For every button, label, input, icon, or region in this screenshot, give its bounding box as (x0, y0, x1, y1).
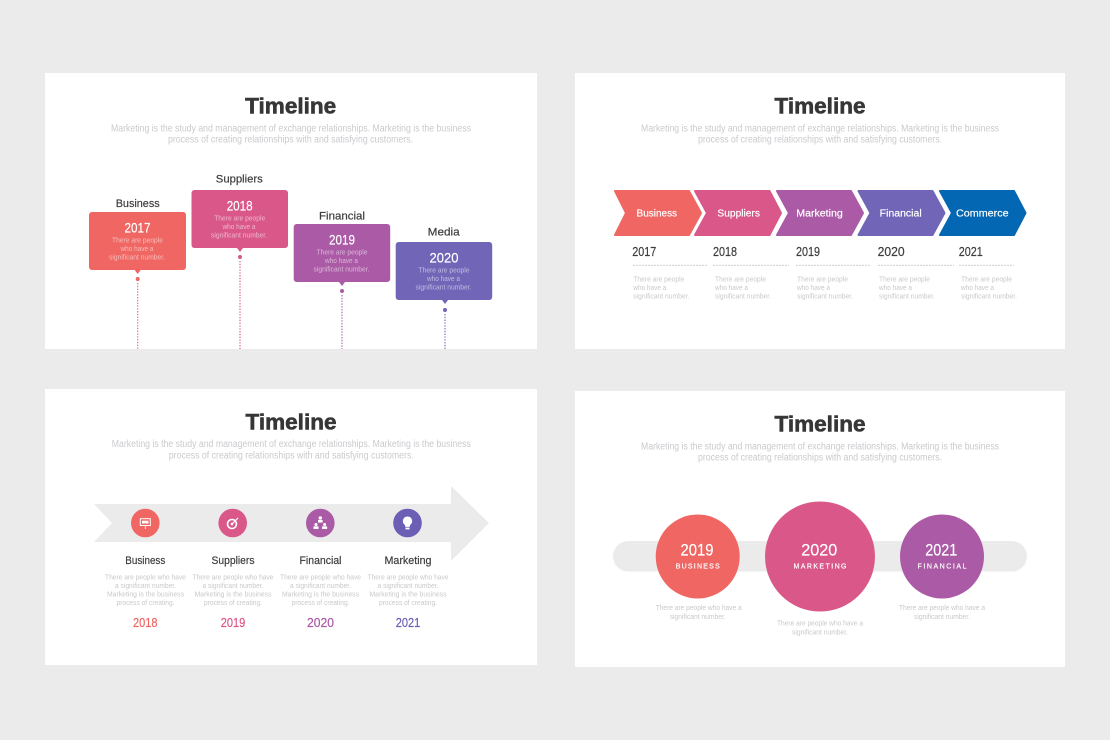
circle: 2019 Business: There are people who have a (656, 603, 742, 612)
subtitle: Marketing is the study and management of exchange relationships. Marketing is the business (112, 439, 471, 450)
milestone: Media 2020: significant number. (416, 282, 472, 292)
circle: 2019 Business: BUSINESS (676, 564, 720, 571)
step: Marketing: Marketing is the business (370, 590, 447, 599)
step details: 2020: 2020 (878, 244, 905, 259)
milestone: Suppliers 2018: who have a (222, 222, 256, 231)
subtitle (641, 442, 999, 464)
panel: stepped callout timeline (45, 73, 537, 349)
step: Suppliers: Suppliers (212, 555, 255, 567)
chevron: Marketing: Marketing (796, 208, 843, 220)
chevron: Business (615, 191, 701, 235)
step: Suppliers: Marketing is the business (194, 590, 272, 599)
chevron: Marketing (777, 191, 863, 235)
chevron: Business: Business (637, 208, 677, 220)
subtitle: process of creating relationships with and satisfying customers. (698, 135, 942, 146)
step: Financial: 2020 (307, 615, 334, 630)
milestone: Financial 2019: Financial (319, 210, 365, 222)
step details: 2018: 2018 (713, 244, 737, 259)
step details: 2020: There are people (879, 275, 930, 284)
step: Business: process of creating. (116, 598, 174, 607)
icon: target (218, 509, 247, 537)
subtitle: process of creating relationships with and satisfying customers. (169, 450, 414, 461)
milestone: Financial 2019 (294, 210, 390, 349)
circle: 2021 Financial: significant number. (914, 612, 970, 621)
step details: 2019: significant number. (797, 292, 853, 300)
title: Timeline (774, 94, 866, 119)
subtitle (641, 124, 999, 146)
step: Financial: a significant number. (290, 581, 351, 590)
step details: 2020: who have a (878, 283, 913, 292)
step: Financial (280, 509, 361, 630)
milestone: Business 2017 (89, 198, 186, 349)
step: Financial: Financial (300, 555, 342, 567)
title: Timeline (245, 94, 336, 119)
step: Suppliers: a significant number. (202, 581, 264, 590)
title: Timeline (246, 409, 336, 434)
milestone: Suppliers 2018: Suppliers (216, 173, 263, 185)
step: Suppliers (192, 509, 274, 630)
subtitle: process of creating relationships with and satisfying customers. (698, 453, 942, 464)
circle: 2020 Marketing: There are people who have a (777, 619, 864, 628)
icon: presentation board (131, 509, 160, 537)
circle: 2019 Business: significant number. (670, 612, 726, 621)
milestone: Financial 2019: who have a (324, 256, 359, 265)
step: Financial: process of creating. (292, 598, 350, 607)
grey pill track (613, 541, 1027, 572)
circle: 2021 Financial (899, 514, 986, 621)
step details: 2019 (796, 244, 871, 300)
chevron: Commerce: Commerce (956, 208, 1009, 220)
subtitle (112, 439, 471, 461)
step: Business: a significant number. (115, 581, 176, 590)
step: Financial: Marketing is the business (282, 590, 359, 599)
step details: 2021: 2021 (959, 244, 983, 259)
circle: 2021 Financial: FINANCIAL (918, 564, 967, 571)
milestone: Media 2020: 2020 (430, 250, 459, 266)
chevron: Financial (858, 191, 944, 235)
milestone: Financial 2019: There are people (316, 248, 368, 257)
circle: 2020 Marketing: significant number. (792, 628, 848, 636)
step details: 2021 (959, 244, 1017, 300)
subtitle (111, 124, 471, 146)
circle: 2020 Marketing (765, 502, 875, 636)
panel: arrow timeline (45, 389, 537, 665)
icon: light bulb (393, 509, 422, 537)
milestone: Media 2020 (396, 227, 492, 349)
circle: 2021 Financial: 2021 (925, 541, 957, 560)
step details: 2021: significant number. (961, 292, 1017, 300)
subtitle: Marketing is the study and management of exchange relationships. Marketing is the business (641, 442, 999, 452)
step details: 2021: who have a (960, 283, 995, 292)
milestone: Business 2017: There are people (112, 236, 163, 245)
step: Marketing (368, 509, 448, 630)
step details: 2017: 2017 (632, 244, 656, 259)
step details: 2020 (878, 244, 954, 300)
big grey arrow (94, 486, 489, 561)
chevron: Suppliers: Suppliers (717, 208, 760, 220)
title: Timeline (774, 412, 866, 437)
panel: circle timeline (575, 391, 1065, 667)
subtitle: process of creating relationships with and satisfying customers. (168, 135, 413, 146)
step: Business: There are people who have (105, 573, 186, 582)
milestone: Suppliers 2018 (192, 173, 288, 349)
step details: 2018 (713, 244, 789, 300)
subtitle: Marketing is the study and management of exchange relationships. Marketing is the business (641, 124, 999, 134)
circle: 2020 Marketing: MARKETING (794, 564, 846, 571)
panel: chevron timeline (575, 73, 1065, 349)
step: Business: Business (125, 555, 166, 567)
step: Business: Marketing is the business (107, 590, 184, 599)
step details: 2019: who have a (796, 283, 831, 292)
chevron: Suppliers (695, 191, 781, 235)
milestone: Media 2020: who have a (426, 274, 461, 283)
chevron: Commerce (940, 191, 1026, 235)
step: Financial: There are people who have (280, 573, 361, 582)
subtitle: Marketing is the study and management of exchange relationships. Marketing is the business (111, 124, 471, 134)
step details: 2017 (632, 244, 708, 300)
milestone: Financial 2019: significant number. (314, 264, 370, 274)
circle: 2020 Marketing: 2020 (801, 541, 837, 560)
step: Suppliers: process of creating. (204, 598, 262, 607)
circle: 2021 Financial: There are people who have a (899, 603, 986, 612)
milestone: Business 2017: 2017 (124, 220, 151, 236)
step details: 2017: significant number. (633, 292, 689, 300)
step: Business (105, 509, 186, 630)
step details: 2019: There are people (797, 275, 848, 284)
step: Marketing: process of creating. (379, 598, 437, 607)
step: Marketing: There are people who have (368, 573, 448, 582)
milestone: Suppliers 2018: There are people (214, 214, 265, 223)
step: Suppliers: 2019 (221, 615, 245, 630)
milestone: Media 2020: Media (428, 227, 461, 239)
step details: 2019: 2019 (796, 244, 820, 259)
milestone: Suppliers 2018: significant number. (211, 230, 267, 240)
step: Marketing: a significant number. (378, 581, 438, 590)
milestone: Media 2020: There are people (418, 266, 470, 275)
step: Marketing: Marketing (384, 555, 432, 567)
circle: 2019 Business: 2019 (680, 541, 714, 560)
milestone: Business 2017: significant number. (109, 252, 165, 262)
chevron: Financial: Financial (880, 208, 922, 220)
step details: 2017: who have a (632, 283, 667, 292)
milestone: Business 2017: who have a (120, 244, 154, 253)
step: Business: 2018 (133, 615, 158, 630)
step details: 2021: There are people (961, 275, 1012, 284)
step details: 2020: significant number. (879, 292, 935, 300)
step details: 2018: There are people (715, 275, 766, 284)
icon: hierarchy (306, 509, 335, 537)
milestone: Financial 2019: 2019 (329, 232, 355, 248)
step: Suppliers: There are people who have (192, 573, 274, 582)
step details: 2017: There are people (633, 275, 684, 284)
step details: 2018: significant number. (715, 292, 771, 300)
milestone: Suppliers 2018: 2018 (227, 198, 253, 214)
milestone: Business 2017: Business (116, 198, 160, 210)
circle: 2019 Business (656, 514, 742, 621)
step: Marketing: 2021 (396, 615, 420, 630)
step details: 2018: who have a (714, 283, 749, 292)
